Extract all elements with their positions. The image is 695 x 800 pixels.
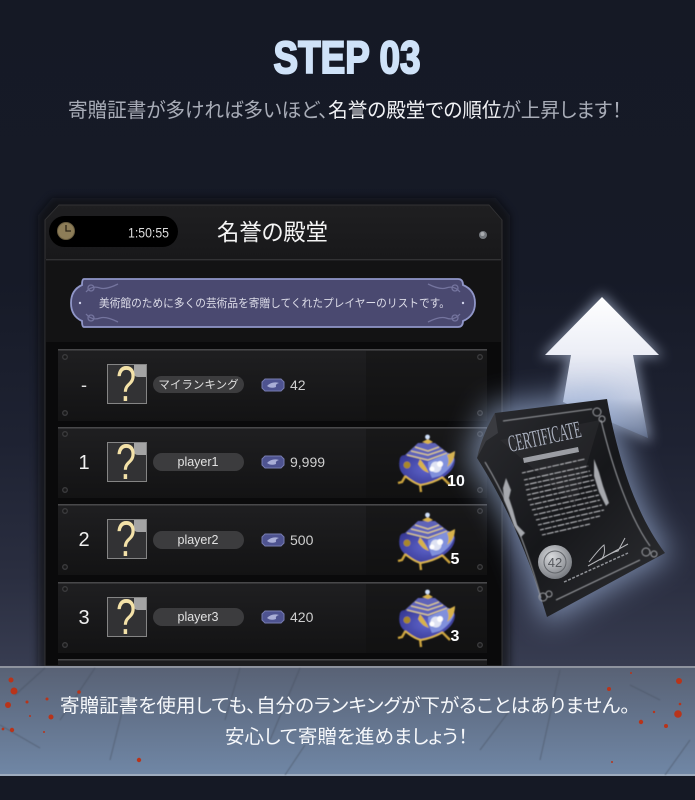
description band background — [46, 261, 501, 342]
banner text line 2: 安心して寄贈を進めましょう！ — [225, 726, 468, 748]
certificate body lines — [522, 459, 604, 535]
row: player1 — [58, 427, 487, 498]
banner text line 1: 寄贈証書を使用しても、自分のランキングが下がることはありません。 — [60, 695, 630, 717]
row: player1: player1 — [178, 455, 219, 469]
title: STEP 03 — [274, 32, 420, 83]
row: player2: 500 — [290, 532, 314, 548]
row: player1: 9,999 — [290, 454, 325, 470]
certificate side ornaments — [503, 459, 609, 537]
certificate footer line — [564, 553, 628, 582]
row: my ranking — [58, 349, 487, 421]
row: player1: 1 — [78, 452, 90, 474]
certificate wax seal: 42 — [548, 555, 562, 570]
certificate wax seal — [538, 545, 572, 579]
row: my ranking: 42 — [290, 377, 306, 393]
bottom dark band — [0, 776, 695, 800]
row: player2 — [58, 504, 487, 575]
certificate heading: CERTIFICATE — [506, 417, 584, 458]
certificate — [468, 392, 672, 625]
row: player3: 3 — [451, 628, 460, 645]
certificate frame — [485, 408, 657, 601]
row: my ranking: マイランキング — [158, 378, 239, 392]
banner scratches — [0, 668, 690, 775]
red splatter right — [607, 672, 682, 763]
row: player1: 10 — [447, 473, 465, 490]
row: player3: 420 — [290, 609, 314, 625]
row: player2: 2 — [78, 529, 90, 551]
row: player3: 3 — [78, 607, 90, 629]
row: player3 — [58, 582, 487, 653]
notice banner — [0, 666, 695, 776]
arrow: rising rank — [540, 293, 664, 442]
row: player2: player2 — [178, 533, 219, 547]
row: player3: player3 — [178, 610, 219, 624]
settings gem icon — [479, 231, 487, 239]
timer pill: 1:50:55 — [128, 226, 169, 240]
panel header — [46, 206, 502, 260]
row: player2: 5 — [451, 551, 460, 568]
certificate sheet — [477, 399, 665, 617]
subtitle: 寄贈証書が多ければ多いほど、名誉の殿堂での順位が上昇します！ — [68, 99, 622, 122]
panel heading: 名誉の殿堂 — [217, 219, 328, 245]
timer pill — [49, 216, 178, 247]
certificate signature — [588, 538, 628, 566]
description plate — [71, 279, 475, 327]
certificate banner line — [523, 447, 579, 463]
red splatter left — [2, 678, 141, 762]
description plate: 美術館のために多くの芸術品を寄贈してくれたプレイヤーのリストです。 — [99, 296, 450, 310]
panel: hall of fame — [38, 198, 510, 670]
certificate glow — [468, 392, 672, 625]
row: my ranking: - — [81, 375, 87, 395]
row: partially hidden fifth row — [58, 659, 487, 667]
